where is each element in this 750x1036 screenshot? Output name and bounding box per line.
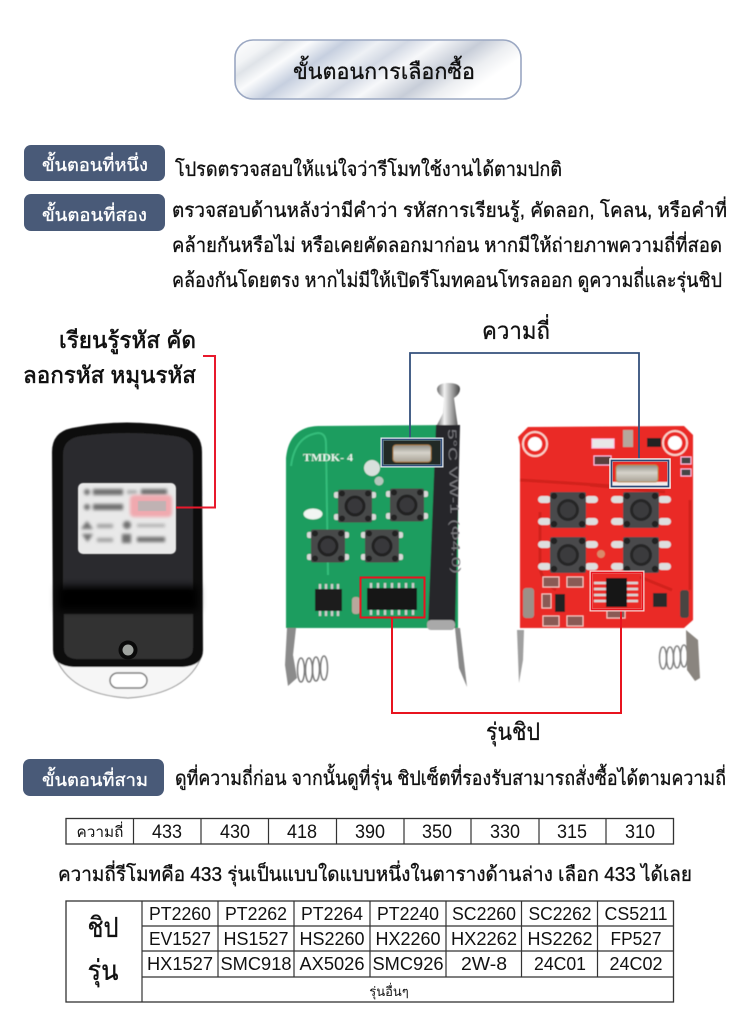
chip cells: SMC918	[220, 954, 292, 974]
chip cells: PT2260	[149, 904, 211, 924]
chip cells	[147, 904, 668, 974]
step two text: คล้ายกันหรือไม่ หรือเคยคัดลอกมาก่อน หากมีให้ถ่ายภาพความถี่ที่สอด	[172, 231, 722, 257]
row header	[88, 912, 118, 988]
chip cells: PT2240	[377, 904, 439, 924]
chip highlight boxes and connector	[360, 572, 643, 713]
spring and contacts	[298, 656, 328, 682]
chip cells: CS5211	[604, 904, 668, 924]
step one badge	[24, 145, 165, 181]
chip cells: SC2262	[528, 904, 592, 924]
remote photo	[52, 422, 203, 698]
step one badge: ขั้นตอนที่หนึ่ง	[42, 152, 148, 175]
frequency table: 418	[287, 822, 317, 843]
antenna	[427, 383, 463, 630]
frequency table: 310	[625, 822, 655, 843]
chip cells: SC2260	[452, 904, 516, 924]
step one text: โปรดตรวจสอบให้แน่ใจว่ารีโมทใช้งานได้ตามปกติ	[175, 158, 562, 181]
title banner	[235, 40, 521, 99]
row header: ชิป	[88, 912, 118, 943]
step three badge: ขั้นตอนที่สาม	[42, 767, 148, 790]
chip cells: HX2260	[376, 929, 440, 949]
chip model table	[66, 901, 674, 1002]
chip cells: FP527	[610, 929, 662, 949]
frequency table: 315	[557, 822, 587, 843]
chip cells: SMC926	[372, 954, 444, 974]
chip cells: PT2262	[225, 904, 287, 924]
title banner: ขั้นตอนการเลือกซื้อ	[293, 56, 475, 84]
chip cells: HX1527	[147, 954, 213, 974]
chip cells: 24C01	[534, 954, 586, 974]
step two text: ตรวจสอบด้านหลังว่ามีคำว่า รหัสการเรียนรู้, คัดลอก, โคลน, หรือคำที่	[172, 196, 727, 223]
callout label: learning code: ลอกรหัส หมุนรหัส	[23, 362, 196, 389]
chip cells: HS1527	[224, 929, 288, 949]
step two badge	[24, 194, 165, 231]
red circuit board	[517, 426, 700, 683]
frequency table: 430	[220, 822, 250, 843]
crystal	[383, 440, 440, 465]
chip cells: 24C02	[610, 954, 662, 974]
frequency highlight boxes and connector	[382, 353, 669, 487]
other models row: รุ่นอื่นๆ	[369, 983, 409, 1000]
chip cells: 2W-8	[461, 954, 507, 974]
chip cells: EV1527	[149, 929, 211, 949]
step two text	[172, 196, 727, 293]
step three badge	[23, 759, 164, 796]
chip cells: PT2264	[301, 904, 363, 924]
chip cells: HS2260	[300, 929, 364, 949]
blurred sticker	[78, 483, 176, 554]
chip cells: AX5026	[300, 954, 364, 974]
frequency table: ความถี่	[76, 821, 124, 841]
callout label: learning code: เรียนรู้รหัส คัด	[59, 327, 196, 354]
frequency table	[66, 818, 674, 844]
label: frequency: ความถี่	[482, 314, 550, 345]
step two badge: ขั้นตอนที่สอง	[42, 202, 147, 225]
label: chip model: รุ่นชิป	[486, 719, 540, 747]
green circuit board	[285, 383, 467, 687]
table caption: ความถี่รีโมทคือ 433 รุ่นเป็นแบบใดแบบหนึ่งในตารางด้านล่าง เลือก 433 ได้เลย	[58, 860, 692, 887]
antenna: 5°C VW-1 (Φ4.0)	[445, 429, 463, 574]
frequency table: 390	[355, 822, 385, 843]
callout label: learning code	[23, 327, 196, 389]
chip cells: HX2262	[451, 929, 517, 949]
frequency table: 330	[490, 822, 520, 843]
chip cells: HS2262	[528, 929, 592, 949]
frequency table: 433	[152, 822, 182, 843]
green circuit board: TMDK- 4	[303, 452, 354, 464]
red leader line from sticker	[176, 356, 215, 508]
frequency table: 350	[422, 822, 452, 843]
row header: รุ่น	[88, 955, 118, 988]
